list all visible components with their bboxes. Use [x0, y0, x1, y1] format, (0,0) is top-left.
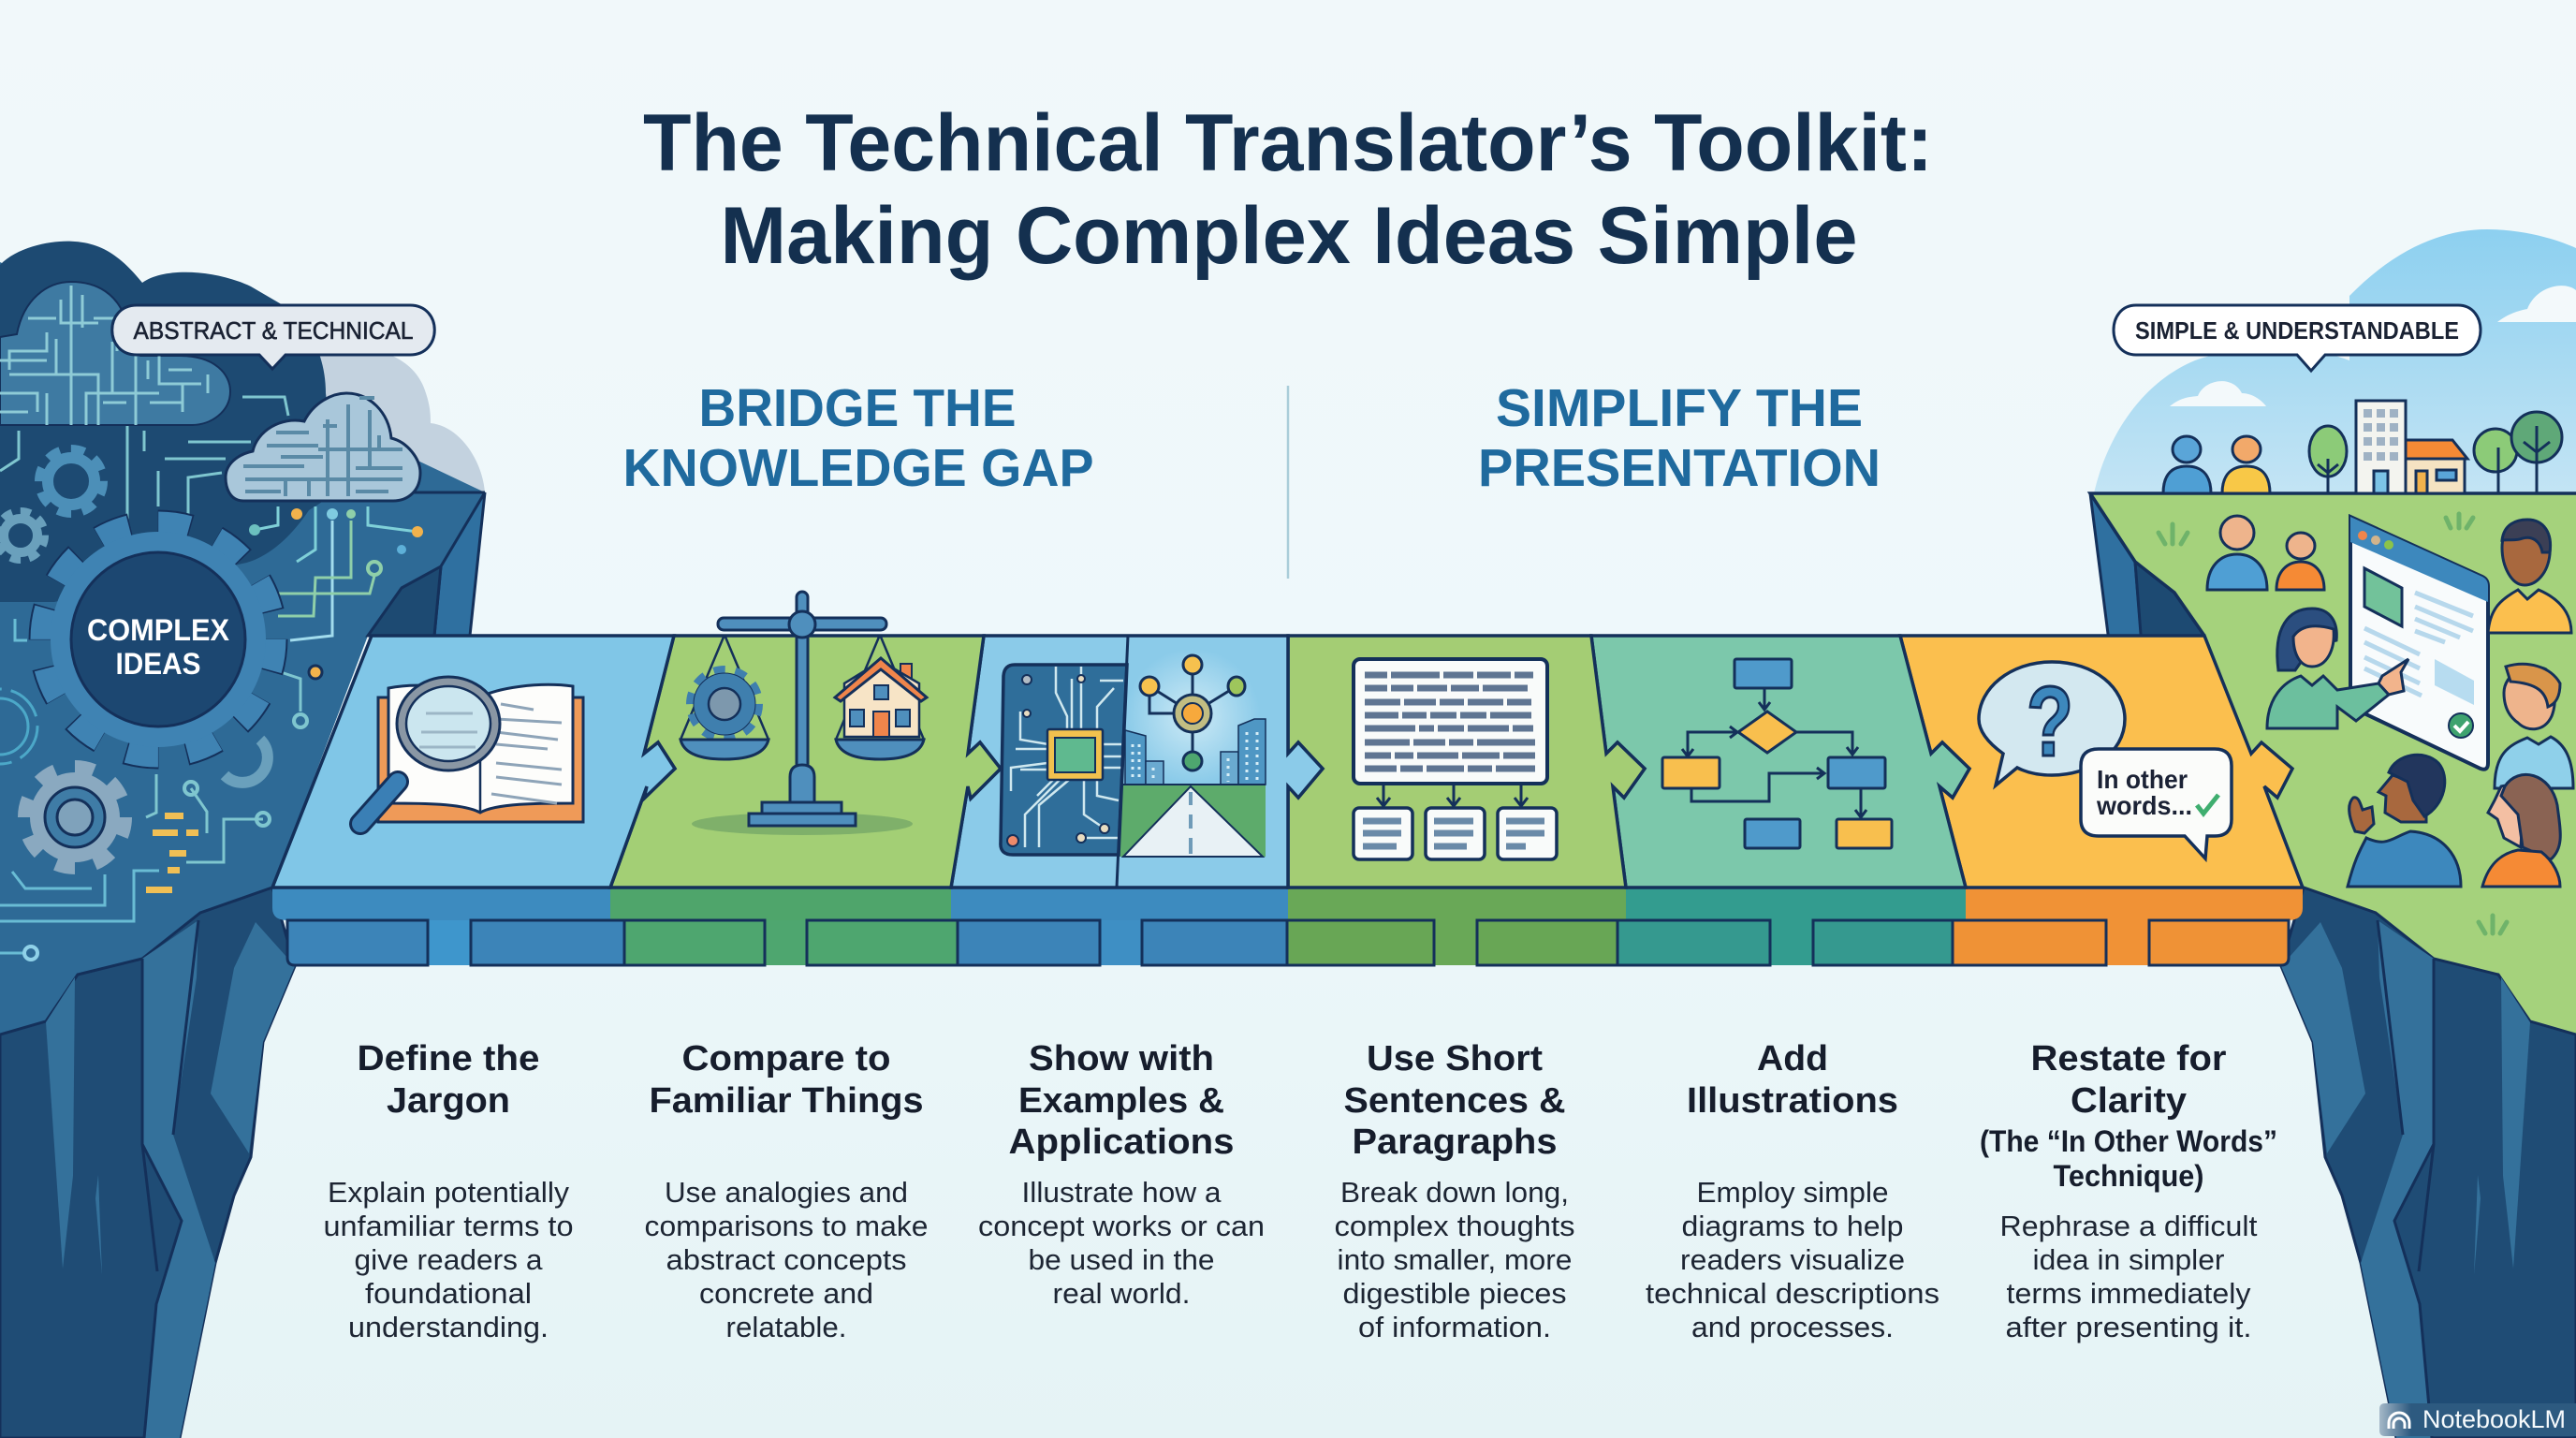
man in blue — [2348, 755, 2461, 887]
panel 2 deck — [610, 636, 1001, 888]
heading: bridge the knowledge gap: KNOWLEDGE GAP — [623, 438, 1093, 498]
column 4: use short sentences: complex thoughts — [1335, 1210, 1574, 1242]
column 4: use short sentences: of information. — [1358, 1311, 1551, 1343]
column 5: add illustrations: readers visualize — [1680, 1243, 1905, 1276]
column 2: compare to familiar things: Familiar Things — [650, 1081, 923, 1121]
panel 5 deck — [1591, 636, 1969, 888]
column 4: use short sentences: Paragraphs — [1352, 1123, 1558, 1162]
column 1: define the jargon: foundational — [365, 1277, 532, 1310]
column 6: restate for clarity: terms immediately — [2007, 1277, 2251, 1310]
column 3: show with examples: Examples & — [1018, 1081, 1224, 1121]
chip — [1047, 729, 1103, 780]
column 1: define the jargon — [324, 1039, 573, 1343]
circuit board — [1001, 665, 1127, 855]
cliff face below grass — [2090, 493, 2142, 641]
column 2: compare to familiar things: relatable. — [726, 1311, 846, 1343]
column 5: add illustrations: technical descriptions — [1646, 1277, 1939, 1310]
column 5: add illustrations: and processes. — [1691, 1311, 1894, 1343]
gear hub: complex ideas — [71, 552, 245, 726]
panel 1 deck — [272, 636, 675, 888]
heading: simplify the presentation — [1478, 378, 1881, 498]
bridge beams — [287, 920, 2289, 965]
column 6: restate for clarity: (The “In Other Words” — [1980, 1124, 2277, 1158]
column 6: restate for clarity: after presenting it. — [2005, 1311, 2252, 1343]
horizon people — [2163, 436, 2270, 493]
big cloud with circuit — [0, 282, 230, 425]
column 4: use short sentences: Break down long, — [1340, 1176, 1569, 1209]
bubble: abstract and technical — [112, 305, 434, 369]
gear hub: complex ideas: COMPLEX — [87, 613, 230, 647]
column 2: compare to familiar things: Compare to — [681, 1039, 891, 1078]
column 2: compare to familiar things: comparisons to make — [644, 1210, 929, 1242]
icon: restate speech bubbles — [1979, 662, 2232, 858]
panel 3 deck — [951, 636, 1323, 888]
column 3: show with examples: concept works or can — [978, 1210, 1265, 1242]
column 4: use short sentences: Sentences & — [1344, 1081, 1565, 1121]
in other words bubble: words... — [2096, 791, 2192, 820]
cliff rock face — [0, 888, 295, 1438]
gear hub: complex ideas: IDEAS — [116, 647, 200, 681]
column 3: show with examples: real world. — [1052, 1277, 1191, 1310]
column 6: restate for clarity: Restate for — [2031, 1039, 2227, 1078]
circuit dots — [249, 508, 423, 679]
column 6: restate for clarity: Rephrase a difficult — [1999, 1210, 2258, 1242]
back cloud — [281, 346, 485, 496]
watermark: NotebookLM — [2379, 1403, 2576, 1436]
bridge — [272, 636, 2303, 965]
watermark: NotebookLM: NotebookLM — [2422, 1405, 2566, 1433]
column 4: use short sentences: Use Short — [1367, 1039, 1543, 1078]
light cloud — [226, 393, 420, 501]
column 6: restate for clarity: idea in simpler — [2033, 1243, 2224, 1276]
in other words bubble — [2081, 749, 2232, 858]
column 3: show with examples: Illustrate how a — [1022, 1176, 1222, 1209]
question bubble: ? — [2027, 667, 2073, 777]
browser window — [2350, 517, 2488, 770]
column 5: add illustrations — [1646, 1039, 1939, 1343]
man top right — [2488, 520, 2571, 633]
column 5: add illustrations: diagrams to help — [1681, 1210, 1904, 1242]
title — [643, 98, 1933, 281]
horizon buildings — [2356, 401, 2467, 493]
bridge under-deck band — [272, 888, 2303, 920]
icon: long text to short paragraphs — [1354, 659, 1557, 859]
right cliff: simple side — [2090, 229, 2576, 1438]
column 2: compare to familiar things — [644, 1039, 929, 1343]
column 4: use short sentences — [1335, 1039, 1574, 1343]
panel 6 deck — [1900, 636, 2303, 888]
man middle right — [2495, 664, 2573, 788]
column 4: use short sentences: into smaller, more — [1337, 1243, 1573, 1276]
column 3: show with examples: Show with — [1029, 1039, 1214, 1078]
right pan with house — [835, 658, 927, 759]
column 3: show with examples — [978, 1039, 1265, 1310]
icon: circuit board and real-world application — [1001, 636, 1266, 888]
column 3: show with examples: be used in the — [1028, 1243, 1215, 1276]
title: The Technical Translator’s Toolkit: — [643, 98, 1933, 188]
question bubble — [1979, 662, 2125, 785]
column 5: add illustrations: Illustrations — [1687, 1081, 1898, 1121]
icon: book and magnifier — [360, 677, 583, 824]
column 1: define the jargon: understanding. — [348, 1311, 549, 1343]
rock face — [2281, 888, 2576, 1438]
woman in orange — [2482, 774, 2560, 887]
column 6: restate for clarity: Technique) — [2054, 1159, 2203, 1193]
clouds — [2170, 286, 2576, 406]
column 1: define the jargon: Jargon — [387, 1081, 510, 1121]
in other words bubble: In other — [2097, 765, 2188, 794]
left pan with gear — [681, 673, 768, 759]
sky — [2094, 229, 2576, 493]
grass — [2090, 493, 2576, 1035]
bubble: simple and understandable: SIMPLE & UNDERSTANDABLE — [2135, 316, 2459, 345]
column 5: add illustrations: Add — [1757, 1039, 1828, 1078]
column 1: define the jargon: unfamiliar terms to — [324, 1210, 573, 1242]
column 2: compare to familiar things: concrete and — [699, 1277, 873, 1310]
circuit traces — [0, 397, 417, 960]
column 4: use short sentences: digestible pieces — [1342, 1277, 1567, 1310]
column 1: define the jargon: Define the — [358, 1039, 539, 1078]
horizon trees — [2309, 412, 2562, 493]
left cliff: complex ideas — [0, 242, 485, 1438]
column 5: add illustrations: Employ simple — [1696, 1176, 1889, 1209]
bubble: simple and understandable — [2114, 305, 2481, 371]
column 1: define the jargon: give readers a — [354, 1243, 543, 1276]
bubble: abstract and technical: ABSTRACT & TECHNICAL — [133, 316, 414, 345]
heading: simplify the presentation: SIMPLIFY THE — [1496, 378, 1863, 438]
column 3: show with examples: Applications — [1009, 1123, 1234, 1162]
title: Making Complex Ideas Simple — [721, 191, 1857, 281]
column 2: compare to familiar things: Use analogies and — [665, 1176, 908, 1209]
cliff body — [0, 262, 485, 1039]
gears — [0, 453, 273, 866]
heading: bridge the knowledge gap: BRIDGE THE — [698, 378, 1017, 438]
panel 4 deck — [1288, 636, 1645, 888]
yellow dashes — [146, 813, 198, 893]
icon: balance scale — [681, 592, 927, 835]
audience people — [2207, 516, 2324, 590]
heading: simplify the presentation: PRESENTATION — [1478, 438, 1881, 498]
heading: bridge the knowledge gap — [623, 378, 1093, 498]
application scene — [1119, 649, 1266, 857]
column 6: restate for clarity: Clarity — [2071, 1081, 2187, 1121]
column 2: compare to familiar things: abstract concepts — [666, 1243, 906, 1276]
column 1: define the jargon: Explain potentially — [328, 1176, 570, 1209]
icon: flowchart — [1662, 659, 1892, 848]
presenter — [2267, 609, 2408, 728]
column 6: restate for clarity — [1980, 1039, 2277, 1343]
grass tufts — [2159, 514, 2507, 933]
